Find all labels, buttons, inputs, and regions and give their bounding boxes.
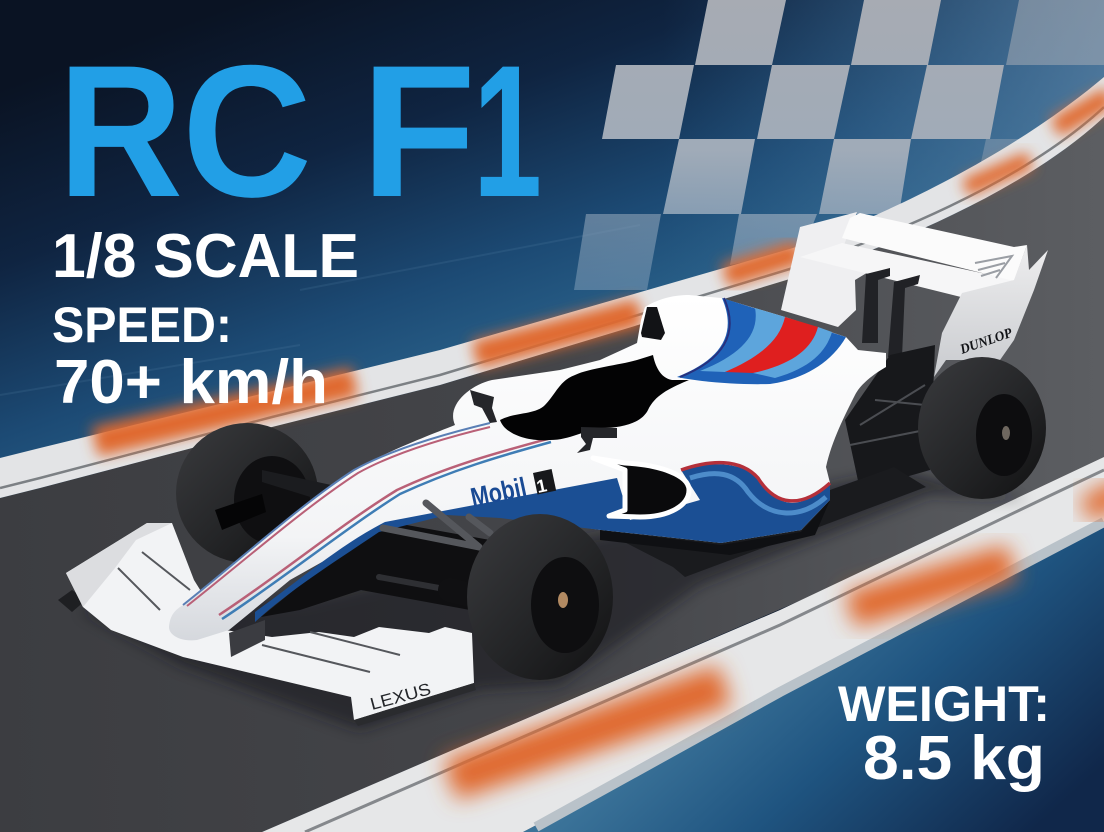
car shadow <box>80 470 1030 730</box>
speed block: SPEED: <box>52 297 232 353</box>
right front wheel <box>467 514 613 680</box>
rear wing <box>781 212 1048 377</box>
speed block <box>52 297 328 417</box>
speed block: 70+ km/h <box>54 348 328 417</box>
engine cover livery <box>677 298 846 384</box>
sidepod stripes <box>681 463 830 513</box>
weight block: 8.5 kg <box>863 724 1045 793</box>
title: R <box>58 26 183 236</box>
sidepod inlet <box>593 458 689 517</box>
checkered flag <box>574 0 1104 290</box>
front wing <box>58 523 476 726</box>
scale label: 1/8 SCALE <box>52 222 359 291</box>
rear wheel <box>918 357 1046 499</box>
dark sill <box>600 500 830 555</box>
title <box>58 26 542 236</box>
nose pinstripes upper <box>183 423 490 606</box>
background sky <box>0 0 1104 560</box>
wing struts <box>862 268 920 357</box>
right endplate <box>934 245 1048 377</box>
weight block: WEIGHT: <box>838 676 1050 732</box>
air intake <box>641 307 665 340</box>
title: 1 <box>473 26 542 236</box>
upper curb <box>0 77 1104 498</box>
race car <box>58 212 1048 726</box>
right mirror <box>577 427 617 453</box>
title: F <box>361 26 476 236</box>
blue lower bodywork <box>255 464 830 622</box>
weight block <box>838 676 1050 793</box>
front suspension <box>379 503 490 595</box>
rear suspension <box>845 345 935 490</box>
text: Mobil 1 logo: Mobil <box>468 472 529 513</box>
text: Dunlop: DUNLOP <box>958 326 1015 358</box>
title: C <box>182 26 312 236</box>
cockpit <box>500 355 689 440</box>
nose pillar <box>229 620 265 657</box>
left front wheel <box>176 423 345 563</box>
text: Lexus: LEXUS <box>368 679 433 714</box>
nose pinstripes lower <box>219 438 551 619</box>
lower curb <box>262 457 1104 832</box>
floor <box>601 467 926 577</box>
underside shadow <box>261 520 490 617</box>
left mirror <box>470 390 497 423</box>
text: Mobil 1 logo: 1 <box>535 475 549 497</box>
main body <box>169 295 886 640</box>
lower blue verge <box>523 527 1104 832</box>
